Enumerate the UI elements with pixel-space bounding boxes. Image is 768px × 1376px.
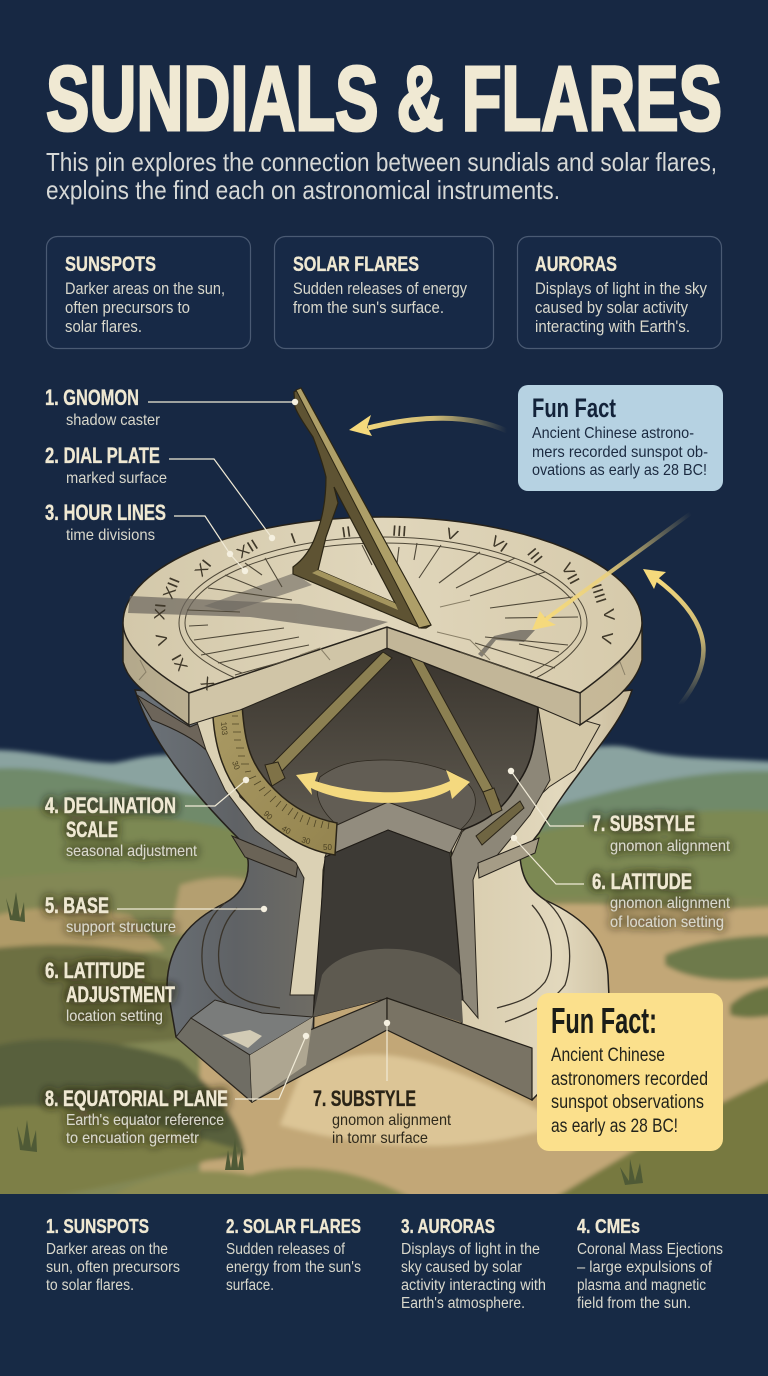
- panel: solar flares: [274, 236, 494, 348]
- panel: auroras: caused by solar activity: [535, 299, 689, 317]
- panel: solar flares: SOLAR FLARES: [293, 253, 419, 276]
- roman numerals: VII: [558, 560, 583, 587]
- roman numerals: VI: [487, 532, 511, 556]
- label: declination scale: seasonal adjustment: [66, 843, 197, 860]
- shadow of gnomon: [128, 596, 388, 632]
- lower chamber floor: [313, 949, 463, 1023]
- sundial illustration: [123, 388, 642, 1102]
- label: dial plate: [45, 443, 275, 541]
- footer: auroras: Displays of light in the: [401, 1241, 540, 1258]
- label: equatorial plane: 8. EQUATORIAL PLANE: [45, 1086, 228, 1111]
- cut vertex edge: [386, 627, 388, 648]
- footer: auroras: 3. AURORAS: [401, 1216, 495, 1238]
- panel: sunspots: [46, 236, 250, 348]
- footer: sunspots: Darker areas on the: [46, 1241, 168, 1258]
- landscape scene: [0, 746, 768, 1210]
- roman numerals: V: [443, 524, 460, 544]
- label: base: 5. BASE: [45, 893, 109, 918]
- label: base: support structure: [66, 919, 176, 936]
- arrow: curved right: [643, 569, 703, 705]
- roman numerals: II: [340, 523, 352, 541]
- footer: solar flares: Sudden releases of: [226, 1241, 346, 1258]
- declination scale: 30: [300, 835, 312, 846]
- roman numerals: V: [597, 630, 616, 645]
- label: substyle bottom: 7. SUBSTYLE: [313, 1086, 416, 1111]
- base top highlight: [222, 1030, 262, 1048]
- roman numerals: XII: [233, 536, 261, 562]
- label: latitude adjustment: [45, 958, 175, 1025]
- arrow: straight to dial shadow: [532, 513, 691, 630]
- upper bowl dark left: [137, 695, 214, 750]
- roman numerals: IIII: [587, 581, 610, 606]
- roman numerals: X: [197, 673, 218, 694]
- footer: CMEs: plasma and magnetic: [577, 1277, 706, 1294]
- roman numerals: III: [523, 545, 546, 567]
- footer: CMEs: Coronal Mass Ejections: [577, 1241, 723, 1258]
- panel: sunspots: solar flares.: [65, 318, 142, 336]
- label: substyle bottom: [313, 1020, 452, 1147]
- callout: blue fun fact: ovations as early as 28 BC!: [532, 462, 707, 479]
- label: declination scale: SCALE: [66, 817, 118, 842]
- chamber inner bowl: [317, 760, 475, 830]
- roman numerals: I: [288, 529, 299, 547]
- base corner top: [191, 1000, 313, 1055]
- declination scale: 90: [262, 809, 275, 822]
- panel: solar flares: from the sun's surface.: [293, 299, 444, 317]
- callout: yellow fun fact: as early as 28 BC!: [551, 1116, 678, 1137]
- label: base: [45, 893, 267, 936]
- panel: auroras: [518, 236, 722, 348]
- label: gnomon: shadow caster: [66, 412, 161, 429]
- label: declination scale: [45, 777, 249, 860]
- lower chamber: [313, 830, 463, 1017]
- footer: solar flares: surface.: [226, 1277, 274, 1294]
- panel: auroras: Displays of light in the sky: [535, 280, 708, 298]
- footer: sunspots: to solar flares.: [46, 1277, 134, 1294]
- footer: sunspots: 1. SUNSPOTS: [46, 1216, 149, 1238]
- roman numerals: XII: [159, 575, 183, 602]
- footer: auroras: sky caused by solar: [401, 1259, 522, 1276]
- base rings: [202, 900, 570, 1022]
- footer: solar flares: [226, 1216, 361, 1294]
- roman numerals: V: [600, 608, 618, 621]
- label: equatorial plane: [45, 1033, 309, 1147]
- grass tufts: [6, 892, 643, 1185]
- callout: yellow fun fact: astronomers recorded: [551, 1069, 708, 1090]
- declination scale: 103: [219, 721, 229, 736]
- roman numerals: XI: [168, 651, 191, 674]
- pedestal right body: [451, 690, 632, 1100]
- hour lines: [187, 543, 578, 678]
- footer: solar flares: 2. SOLAR FLARES: [226, 1216, 361, 1238]
- label: substyle bottom: in tomr surface: [332, 1130, 428, 1147]
- label: substyle right: [508, 768, 731, 855]
- label: latitude right: [511, 835, 731, 931]
- neck ring left: [232, 836, 298, 877]
- label: latitude adjustment: ADJUSTMENT: [66, 982, 175, 1007]
- upper chamber: [242, 648, 538, 830]
- label: substyle right: 7. SUBSTYLE: [592, 811, 695, 836]
- footer: CMEs: field from the sun.: [577, 1295, 691, 1312]
- neck ring right: [478, 838, 539, 878]
- left stone cut band: [197, 717, 335, 995]
- label: gnomon: [45, 385, 298, 429]
- brass rod left: [272, 652, 392, 772]
- base corner left face: [176, 1018, 252, 1102]
- base wedge left light face: [250, 1017, 313, 1102]
- label: hour lines: time divisions: [66, 527, 155, 544]
- panel: auroras: AURORAS: [535, 253, 617, 276]
- dial plate top: [123, 517, 642, 693]
- cut wedge left face: [189, 627, 387, 725]
- label: latitude adjustment: 6. LATITUDE: [45, 958, 145, 983]
- declination scale: 50: [323, 843, 332, 852]
- footer: sunspots: [46, 1216, 180, 1294]
- footer: auroras: Earth's atmosphere.: [401, 1295, 525, 1312]
- panel: solar flares: Sudden releases of energy: [293, 280, 468, 298]
- arrow: fun fact to gnomon: [349, 415, 507, 436]
- footer: solar flares: energy from the sun's: [226, 1259, 361, 1276]
- latitude slider: [476, 801, 524, 845]
- footer: CMEs: [577, 1216, 723, 1312]
- label: dial plate: marked surface: [66, 470, 167, 487]
- middle cut face: [325, 802, 462, 857]
- cut wedge right face: [387, 627, 580, 725]
- disc side rim: [123, 622, 642, 725]
- rod clamp left: [265, 762, 285, 786]
- brass rod right: [410, 654, 499, 805]
- subtitle: [46, 147, 717, 205]
- pedestal left body: [135, 690, 318, 1102]
- base wedge left face: [250, 998, 387, 1102]
- label: substyle right: gnomon alignment: [610, 838, 731, 855]
- right stone cut band: [451, 707, 550, 1018]
- base wedge right face: [387, 998, 532, 1100]
- label: hour lines: [45, 500, 248, 574]
- gnomon: [293, 388, 431, 628]
- footer: auroras: activity interacting with: [401, 1277, 546, 1294]
- shadow right: [478, 630, 535, 657]
- right upper cream: [535, 707, 600, 800]
- label: latitude right: 6. LATITUDE: [592, 869, 692, 894]
- footer: CMEs: – large expulsions of: [577, 1259, 713, 1276]
- callout: blue fun fact: [518, 385, 723, 491]
- roman numerals: XI: [191, 556, 215, 580]
- panel: sunspots: often precursors to: [65, 299, 190, 317]
- callout: yellow fun fact: Fun Fact:: [551, 1000, 657, 1041]
- roman numerals: V: [152, 631, 172, 647]
- label: declination scale: 4. DECLINATION: [45, 793, 176, 818]
- callout: yellow fun fact: [537, 993, 723, 1151]
- subtitle: exploins the find each on astronomical instruments.: [46, 175, 560, 205]
- double arrow: [296, 770, 470, 803]
- rod clamp right: [483, 788, 502, 815]
- label: gnomon: 1. GNOMON: [45, 385, 139, 410]
- declination scale: 40: [280, 824, 293, 836]
- dial cracks: [139, 600, 625, 680]
- footer: CMEs: 4. CMEs: [577, 1216, 640, 1238]
- label: hour lines: 3. HOUR LINES: [45, 500, 166, 525]
- callout: blue fun fact: mers recorded sunspot ob-: [532, 444, 708, 461]
- label: substyle bottom: gnomon alignment: [332, 1112, 452, 1129]
- label: equatorial plane: Earth's equator reference: [66, 1112, 224, 1129]
- declination scale: 30: [230, 760, 242, 772]
- panel: auroras: interacting with Earth's.: [535, 318, 690, 336]
- label: latitude right: of location setting: [610, 914, 724, 931]
- label: dial plate: 2. DIAL PLATE: [45, 443, 160, 468]
- declination scale: [213, 705, 337, 855]
- label: latitude right: gnomon alignment: [610, 895, 731, 912]
- panel: sunspots: SUNSPOTS: [65, 253, 156, 276]
- roman numerals: [151, 522, 618, 694]
- footer panel: [0, 1194, 768, 1376]
- label: equatorial plane: to encuation germetr: [66, 1130, 200, 1147]
- label: latitude adjustment: location setting: [66, 1008, 163, 1025]
- footer: sunspots: sun, often precursors: [46, 1259, 180, 1276]
- callout: blue fun fact: Fun Fact: [532, 393, 616, 423]
- callout: blue fun fact: Ancient Chinese astrono-: [532, 425, 694, 442]
- roman numerals: XI: [151, 602, 169, 621]
- callout: yellow fun fact: sunspot observations: [551, 1092, 704, 1113]
- shadow upper branch: [204, 573, 312, 612]
- roman numerals: III: [391, 522, 407, 540]
- callout: yellow fun fact: Ancient Chinese: [551, 1045, 665, 1066]
- panel: sunspots: Darker areas on the sun,: [65, 280, 225, 298]
- footer: auroras: [401, 1216, 546, 1312]
- dial circles: [179, 537, 587, 678]
